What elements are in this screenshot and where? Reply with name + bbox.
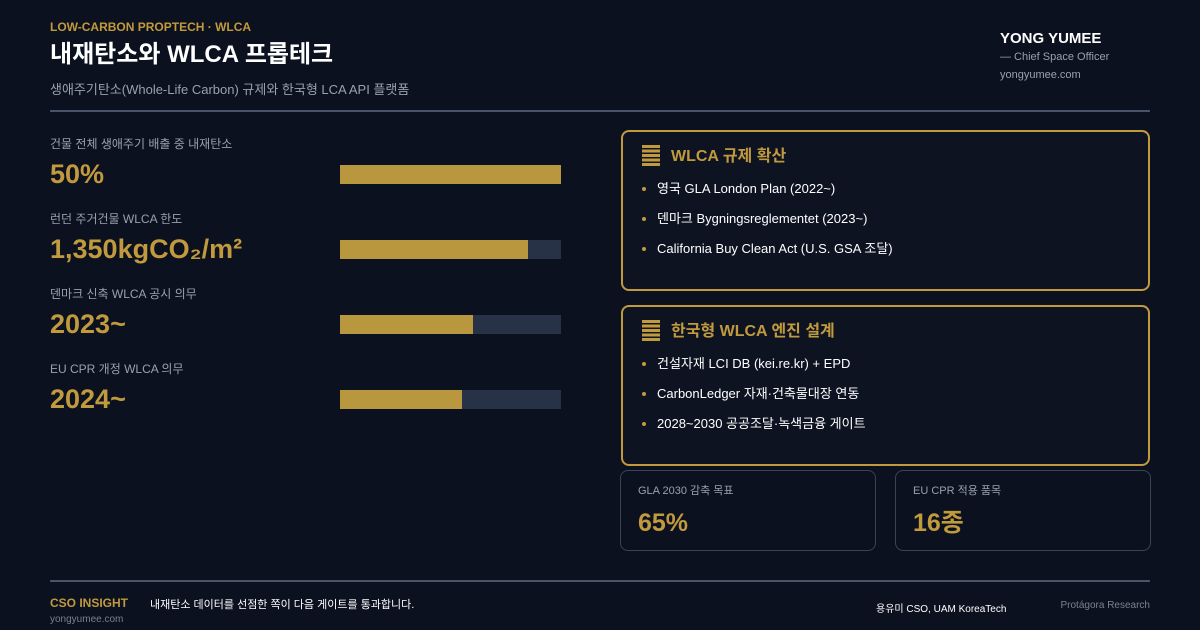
panel: Korean WLCA engine: 건설자재 LCI DB (kei.re.kr) + EPD <box>657 356 850 371</box>
footer: 내재탄소 데이터를 선점한 쪽이 다음 게이트를 통과합니다. <box>150 599 414 611</box>
panel: Korean WLCA engine: 2028~2030 공공조달·녹색금융 게이트 <box>657 416 866 431</box>
footer: Protágora Research <box>1060 600 1150 611</box>
panel: WLCA regulation <box>621 130 1150 291</box>
metric 2: 런던 주거건물 WLCA 한도 <box>50 212 182 226</box>
author block: — Chief Space Officer <box>1000 51 1109 63</box>
metric 4: EU CPR 개정 WLCA 의무 <box>50 362 184 376</box>
panel: Korean WLCA engine <box>621 305 1150 466</box>
author block: YONG YUMEE <box>1000 30 1101 47</box>
stat card 2 <box>895 470 1151 551</box>
metric 3: 2023~ <box>50 309 126 339</box>
panel: Korean WLCA engine: 한국형 WLCA 엔진 설계 <box>671 323 835 340</box>
metric 2: 1,350kgCO₂/m² <box>50 234 242 264</box>
panel: WLCA regulation: 덴마크 Bygningsreglementet (2023~) <box>657 211 867 226</box>
title: 내재탄소와 WLCA 프롭테크 <box>50 41 333 68</box>
footer: CSO INSIGHT <box>50 596 128 610</box>
author block <box>1000 30 1110 81</box>
stat card 1: GLA 2030 감축 목표 <box>638 485 734 497</box>
panel: WLCA regulation: 영국 GLA London Plan (2022~) <box>657 181 835 196</box>
icon: stack <box>642 145 660 167</box>
metric 3 <box>50 287 561 339</box>
metric 3: 덴마크 신축 WLCA 공시 의무 <box>50 287 197 301</box>
stat card 2: EU CPR 적용 품목 <box>913 485 1001 497</box>
author block: yongyumee.com <box>1000 69 1081 81</box>
footer <box>50 596 1150 625</box>
panel: WLCA regulation: California Buy Clean Act (U.S. GSA 조달) <box>657 241 893 256</box>
icon: stack <box>642 320 660 342</box>
stat card 2: 16종 <box>913 509 964 537</box>
metric 1: 건물 전체 생애주기 배출 중 내재탄소 <box>50 137 232 151</box>
metric 4: 2024~ <box>50 384 126 414</box>
stat card 1: 65% <box>638 509 688 537</box>
metric 1: 50% <box>50 159 104 189</box>
footer: 용유미 CSO, UAM KoreaTech <box>876 604 1006 615</box>
metric 2 <box>50 212 561 264</box>
panel: WLCA regulation: WLCA 규제 확산 <box>671 148 786 165</box>
subtitle: 생애주기탄소(Whole-Life Carbon) 규제와 한국형 LCA API 플랫폼 <box>50 82 409 97</box>
header <box>50 20 409 97</box>
metric 4 <box>50 362 561 414</box>
kicker: LOW-CARBON PROPTECH · WLCA <box>50 20 251 34</box>
metric 1 <box>50 137 561 189</box>
panel: Korean WLCA engine: CarbonLedger 자재·건축물대장 연동 <box>657 386 859 401</box>
stat card 1 <box>620 470 876 551</box>
footer: yongyumee.com <box>50 614 123 625</box>
